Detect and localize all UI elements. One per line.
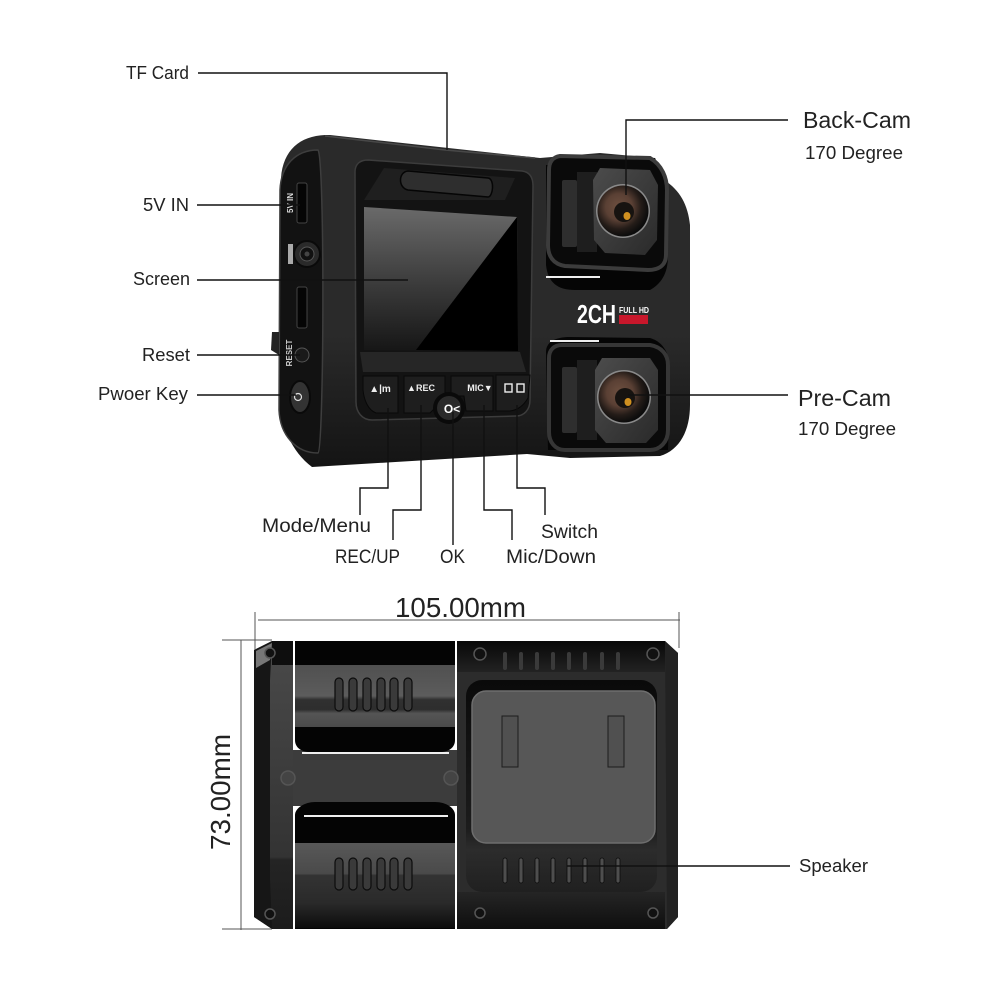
- RESET mark: RESET: [285, 340, 294, 366]
- label: OK: OK: [440, 547, 465, 568]
- speaker vents: [503, 858, 620, 883]
- reset hole: [295, 348, 309, 362]
- rear middle body: [293, 750, 458, 806]
- rear left end: [254, 641, 293, 929]
- label: Back-Cam: Back-Cam: [803, 107, 911, 133]
- rear bottom band: [457, 892, 665, 929]
- button mic: [451, 376, 493, 411]
- button rec: ▲REC: [407, 383, 435, 393]
- leader lines: [197, 73, 790, 866]
- pre lens block: [595, 358, 658, 443]
- button mode: [363, 376, 398, 413]
- pre side shade: [577, 360, 597, 440]
- back lens block: [593, 168, 658, 255]
- label: Mode/Menu: Mode/Menu: [262, 516, 371, 537]
- button mode: ▲|m: [369, 384, 391, 395]
- back housing recess: [546, 158, 668, 290]
- white line: [304, 815, 448, 817]
- back camera: [546, 156, 668, 290]
- AV jack: [294, 241, 320, 267]
- power key: [290, 381, 310, 413]
- side panel: [279, 150, 323, 453]
- dimension: width: 105.00mm: [395, 592, 526, 623]
- bottom roller vents: [335, 858, 412, 890]
- label: 5V IN: 5V IN: [143, 195, 189, 215]
- label: Reset: Reset: [142, 345, 190, 365]
- mount plate: [472, 691, 655, 843]
- button rec: [404, 376, 445, 413]
- reset flap: [271, 332, 279, 355]
- rear top band: [457, 641, 665, 672]
- rear body right: [457, 641, 678, 929]
- back lens: [596, 184, 650, 238]
- bezel upper band: [364, 168, 515, 200]
- rear top vents: [503, 652, 620, 670]
- button switch: [496, 375, 530, 411]
- label: REC/UP: REC/UP: [335, 547, 400, 568]
- dimension lines: [222, 612, 680, 930]
- back side panel: [562, 180, 577, 247]
- pre housing: [549, 345, 668, 450]
- screen: [364, 207, 518, 351]
- dimension: height: 73.00mm: [205, 734, 236, 850]
- OK button: [433, 392, 465, 424]
- 2CH badge: FULL HD: [619, 306, 649, 315]
- usb port: [297, 183, 307, 223]
- pre camera: [546, 337, 670, 450]
- top roller vents: [335, 678, 412, 711]
- white line: [302, 752, 449, 754]
- label: Power key: Pwoer Key: [98, 384, 188, 404]
- label: Pre-Cam: Pre-Cam: [798, 385, 891, 411]
- screen reflection: [416, 217, 518, 351]
- pre white highlight: [550, 340, 599, 342]
- chin: [360, 352, 526, 372]
- back white highlight: [546, 276, 600, 278]
- rear top corner: [272, 641, 293, 665]
- top edge highlight: [325, 136, 535, 158]
- bottom roller: [295, 802, 455, 929]
- label: Switch: Switch: [541, 522, 598, 543]
- label: Mic/Down: Mic/Down: [506, 547, 596, 568]
- mount recess: [466, 680, 657, 892]
- hdmi port: [297, 287, 307, 328]
- back side shade: [577, 172, 597, 252]
- button mic: MIC▼: [467, 383, 493, 393]
- pre side panel: [562, 367, 577, 433]
- label: TF Card: TF Card: [126, 63, 189, 83]
- top slot: [400, 171, 493, 197]
- pre lens: [597, 370, 651, 424]
- screen bezel: [355, 160, 533, 420]
- camera rear view: [254, 641, 678, 929]
- label: Speaker: Speaker: [799, 856, 868, 876]
- camera front view: [271, 135, 690, 467]
- rear left strip: [254, 641, 272, 929]
- label: Pre-Cam angle: 170 Degree: [798, 419, 896, 439]
- OK button: O<: [444, 402, 460, 416]
- label: Back-Cam angle: 170 Degree: [805, 143, 903, 163]
- AV mark: [288, 244, 293, 264]
- rear right edge: [665, 641, 678, 929]
- screws: [265, 648, 659, 919]
- camera body: [279, 135, 690, 467]
- back housing: [548, 156, 667, 270]
- 5V IN mark: 5V IN: [286, 193, 295, 213]
- rear left chamfer highlight: [256, 643, 272, 668]
- label: Screen: Screen: [133, 269, 190, 289]
- top roller: [295, 641, 455, 754]
- 2CH badge: 2CH: [577, 299, 616, 329]
- pre housing recess: [546, 337, 670, 450]
